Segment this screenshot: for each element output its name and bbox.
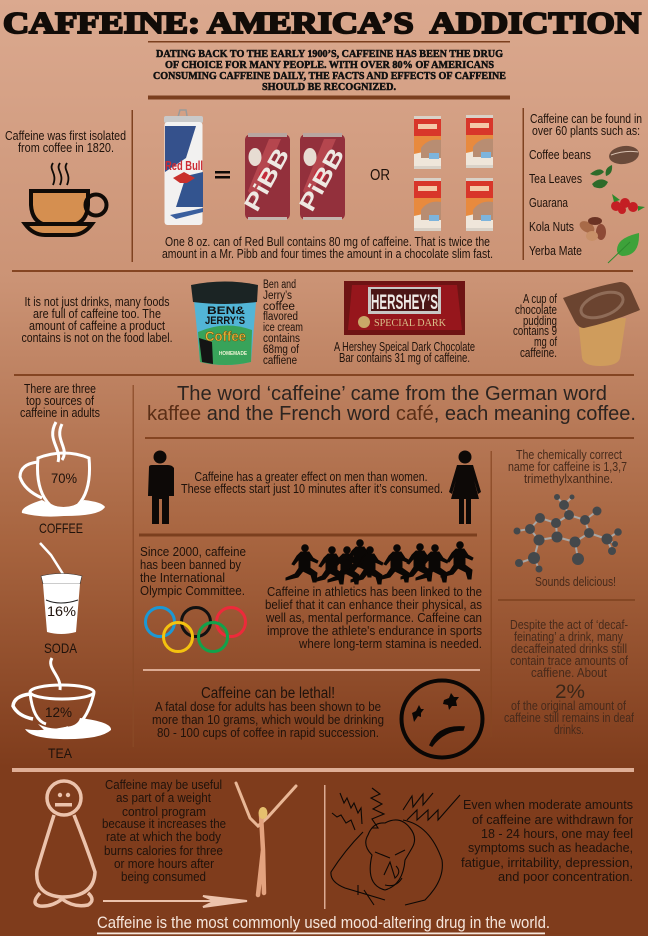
- hersheys caption: A Hershey Speical Dark Chocolate: [334, 340, 475, 354]
- divider: [139, 534, 477, 536]
- icon: ben and jerrys pint: BEN&: [207, 305, 245, 317]
- decaf text: decaffeinated drinks still: [511, 642, 627, 656]
- first isolated text: [5, 129, 126, 155]
- coffee label: COFFEE: [39, 520, 83, 536]
- icon: guarana berries: [611, 194, 645, 214]
- icon: Mr Pibb can 2: PiBB: [294, 143, 349, 215]
- top sources heading: caffeine in adults: [20, 406, 100, 420]
- divider: right: [522, 108, 524, 260]
- athletics text: improve the athlete's endurance in sports: [267, 624, 482, 638]
- pudding text: mg of: [534, 335, 557, 349]
- ben and jerrys text: 68mg of: [263, 344, 300, 356]
- divider: [14, 374, 634, 376]
- pudding text: caffeine.: [520, 346, 557, 360]
- athletics text: where long-term stamina is needed.: [298, 637, 482, 651]
- chemical name text: name for caffeine is 1,3,7: [508, 460, 627, 474]
- icon: hersheys bar: SPECIAL DARK: [374, 318, 447, 329]
- gender text: [181, 470, 443, 496]
- panel: plants: Guarana: [529, 196, 568, 210]
- icon: tea cup: [13, 658, 111, 739]
- vertical divider: [132, 385, 134, 747]
- OR label: OR: [370, 167, 390, 184]
- weight text: being consumed: [121, 870, 206, 884]
- pudding text: chocolate: [515, 303, 557, 317]
- athletics text: [265, 585, 482, 651]
- athletics text: belief that it can enhance their physical, as: [265, 598, 482, 612]
- divider: [498, 599, 635, 601]
- withdrawal text: [461, 798, 633, 884]
- intro block: SHOULD BE RECOGNIZED.: [262, 81, 396, 93]
- icon: slim fast cans: [414, 115, 493, 231]
- icon: coffee percent cup: 70%: [51, 470, 77, 486]
- foods text: It is not just drinks, many foods: [24, 295, 170, 309]
- icon: hersheys bar: HERSHEY’S: [371, 291, 438, 314]
- foods text: are full of caffeine too. The: [33, 307, 161, 321]
- divider: left: [132, 110, 133, 262]
- icon: coffee cup: [25, 163, 106, 235]
- icon: thin dancer: [236, 783, 296, 895]
- pudding text: pudding: [523, 314, 557, 328]
- ben and jerrys text: flavored: [263, 311, 298, 323]
- weight text: rate at which the body: [106, 830, 222, 844]
- icon: round stick figure: [35, 781, 95, 906]
- weight text: as part of a weight: [116, 791, 211, 805]
- ben and jerrys text: Ben and: [263, 279, 296, 291]
- icon: hersheys bar: [344, 281, 465, 335]
- ben and jerrys text: ice cream: [263, 322, 303, 334]
- pudding text: [513, 292, 557, 360]
- icon: red bull can: [164, 110, 203, 225]
- chemical name text: The chemically correct: [516, 448, 622, 462]
- decaf text: 2%: [555, 682, 585, 703]
- panel: plants: Tea Leaves: [529, 172, 582, 186]
- panel: plants: Coffee beans: [529, 148, 591, 162]
- foods text: [22, 295, 172, 345]
- icon: headache figure: [331, 788, 460, 905]
- icon: man: [148, 450, 174, 524]
- icon: olympic rings: [146, 608, 246, 652]
- lethal text: 80 - 100 cups of coffee in rapid succession.: [157, 726, 379, 740]
- foods text: contains is not on the food label.: [22, 331, 172, 345]
- red bull caption: [162, 235, 493, 261]
- icon: red bull can: Red Bull: [165, 158, 203, 173]
- decaf text: contain trace amounts of: [510, 654, 628, 668]
- icon: ben and jerrys pint: Coffee: [205, 328, 246, 344]
- lethal text: more than 10 grams, which would be drinking: [152, 713, 384, 727]
- intro block: [148, 41, 510, 100]
- hersheys caption: Bar contains 31 mg of caffeine.: [339, 351, 470, 365]
- caffeine word origin: kaffee and the French word café, each meaning coffee.: [147, 403, 636, 425]
- chemical name text: trimethylxanthine.: [524, 472, 613, 486]
- first isolated text: from coffee in 1820.: [18, 141, 114, 155]
- decaf text: drinks.: [554, 723, 584, 737]
- decaf text: caffiene. About: [531, 666, 607, 680]
- soda label: SODA: [44, 640, 78, 656]
- icon: coffee percent cup: [20, 422, 105, 517]
- icon: tea cup: 12%: [45, 704, 72, 720]
- lethal text: [152, 685, 384, 740]
- olympic text: the International: [140, 571, 225, 585]
- ben and jerrys text: Jerry’s: [263, 290, 292, 302]
- icon: Mr Pibb can 1: PiBB: [239, 143, 294, 215]
- athletics text: well as, mental performance. Caffeine can: [265, 611, 482, 625]
- pudding text: contains 9: [513, 324, 557, 338]
- intro block: CONSUMING CAFFEINE DAILY, THE FACTS AND EFFECTS OF CAFFEINE: [153, 70, 506, 82]
- ben and jerrys text: caffiene: [263, 355, 297, 367]
- withdrawal text: Even when moderate amounts: [463, 798, 633, 812]
- top sources heading: There are three: [24, 382, 96, 396]
- withdrawal text: fatigue, irritability, depression,: [461, 856, 633, 870]
- decaf text: feinating’ a drink, many: [514, 630, 624, 644]
- gender text: These effects start just 10 minutes after it’s consumed.: [181, 482, 443, 496]
- weight text: Caffeine may be useful: [105, 778, 222, 792]
- icon: dazed face: [402, 680, 482, 758]
- panel: plants: Yerba Mate: [529, 244, 582, 258]
- weight text: because it increases the: [102, 817, 226, 831]
- icon: ben and jerrys pint: HOMEMADE: [219, 351, 247, 357]
- foods text: amount of caffeine a product: [29, 319, 165, 333]
- decaf text: [504, 618, 634, 737]
- first isolated text: Caffeine was first isolated: [5, 129, 126, 143]
- caffeine word origin: [147, 383, 636, 425]
- decaf text: of the original amount of: [511, 699, 626, 713]
- icon: Mr Pibb can 1: [239, 133, 294, 220]
- icon: kola nuts: [578, 217, 606, 241]
- icon: soda cup: 16%: [47, 603, 76, 619]
- weight text: burns calories for three: [104, 844, 223, 858]
- top sources heading: top sources of: [26, 394, 94, 408]
- icon: Mr Pibb can 2: [294, 133, 349, 220]
- red bull caption: One 8 oz. can of Red Bull contains 80 mg of caffeine. That is twice the: [165, 235, 490, 249]
- withdrawal text: 18 - 24 hours, one may feel: [481, 827, 633, 841]
- olympic text: [140, 545, 246, 598]
- divider: [145, 437, 634, 439]
- red bull caption: amount in a Mr. Pibb and four times the amount in a chocolate slim fast.: [162, 247, 493, 261]
- gender text: Caffeine has a greater effect on men than women.: [194, 470, 428, 484]
- divider: light: [324, 785, 326, 909]
- icon: yerba mate leaf: [608, 233, 639, 263]
- divider: light: [12, 768, 634, 772]
- icon: ben and jerrys pint: [191, 282, 258, 365]
- olympic text: has been banned by: [140, 558, 242, 572]
- withdrawal text: symptoms such as headache,: [468, 841, 633, 855]
- pudding text: A cup of: [523, 292, 557, 306]
- icon: woman: [449, 450, 481, 524]
- title: CAFFEINE: AMERICA’S ADDICTION: [3, 5, 641, 40]
- withdrawal text: of caffeine are withdrawn for: [472, 813, 633, 827]
- intro block: DATING BACK TO THE EARLY 1900’S, CAFFEINE HAS BEEN THE DRUG: [156, 48, 503, 60]
- chemical name text: [508, 448, 627, 486]
- icon: pudding cup: [563, 282, 640, 366]
- lethal text: A fatal dose for adults has been shown to be: [155, 700, 381, 714]
- intro block: OF CHOICE FOR MANY PEOPLE. WITH OVER 80% OF AMERICANS: [165, 59, 494, 71]
- olympic text: Since 2000, caffeine: [140, 545, 246, 559]
- panel: plants: Kola Nuts: [529, 220, 574, 234]
- icon: molecule: [514, 494, 622, 572]
- tea label: TEA: [48, 745, 73, 761]
- olympic text: Olympic Committee.: [140, 584, 245, 598]
- top sources heading: [20, 382, 100, 420]
- caffeine word origin: The word ‘caffeine’ came from the German word: [177, 383, 607, 405]
- sounds delicious: Sounds delicious!: [535, 575, 616, 589]
- icon: ben and jerrys pint: JERRY’S: [205, 315, 245, 327]
- weight text: [102, 778, 226, 884]
- decaf text: Despite the act of ‘decaf-: [510, 618, 628, 632]
- equals sign: [215, 171, 230, 178]
- hersheys caption: [334, 340, 475, 365]
- divider: light: [143, 669, 480, 671]
- divider: [12, 270, 633, 272]
- ben and jerrys text: [263, 279, 303, 367]
- athletics text: Caffeine in athletics has been linked to the: [267, 585, 482, 599]
- panel: plants: [529, 112, 645, 263]
- icon: tea leaves: [590, 165, 612, 188]
- ben and jerrys text: contains: [263, 333, 300, 345]
- withdrawal text: and poor concentration.: [498, 870, 633, 884]
- arrow: [103, 896, 247, 907]
- weight text: control program: [122, 805, 206, 819]
- icon: soda cup: [40, 543, 82, 634]
- icon: runners: [286, 539, 473, 584]
- icon: coffee bean: [608, 144, 640, 166]
- weight text: or more hours after: [114, 857, 214, 871]
- bottom statement: Caffeine is the most commonly used mood-altering drug in the world.: [97, 914, 550, 932]
- vertical divider: [490, 451, 492, 737]
- lethal text: Caffeine can be lethal!: [201, 685, 335, 702]
- ben and jerrys text: coffee: [263, 301, 295, 313]
